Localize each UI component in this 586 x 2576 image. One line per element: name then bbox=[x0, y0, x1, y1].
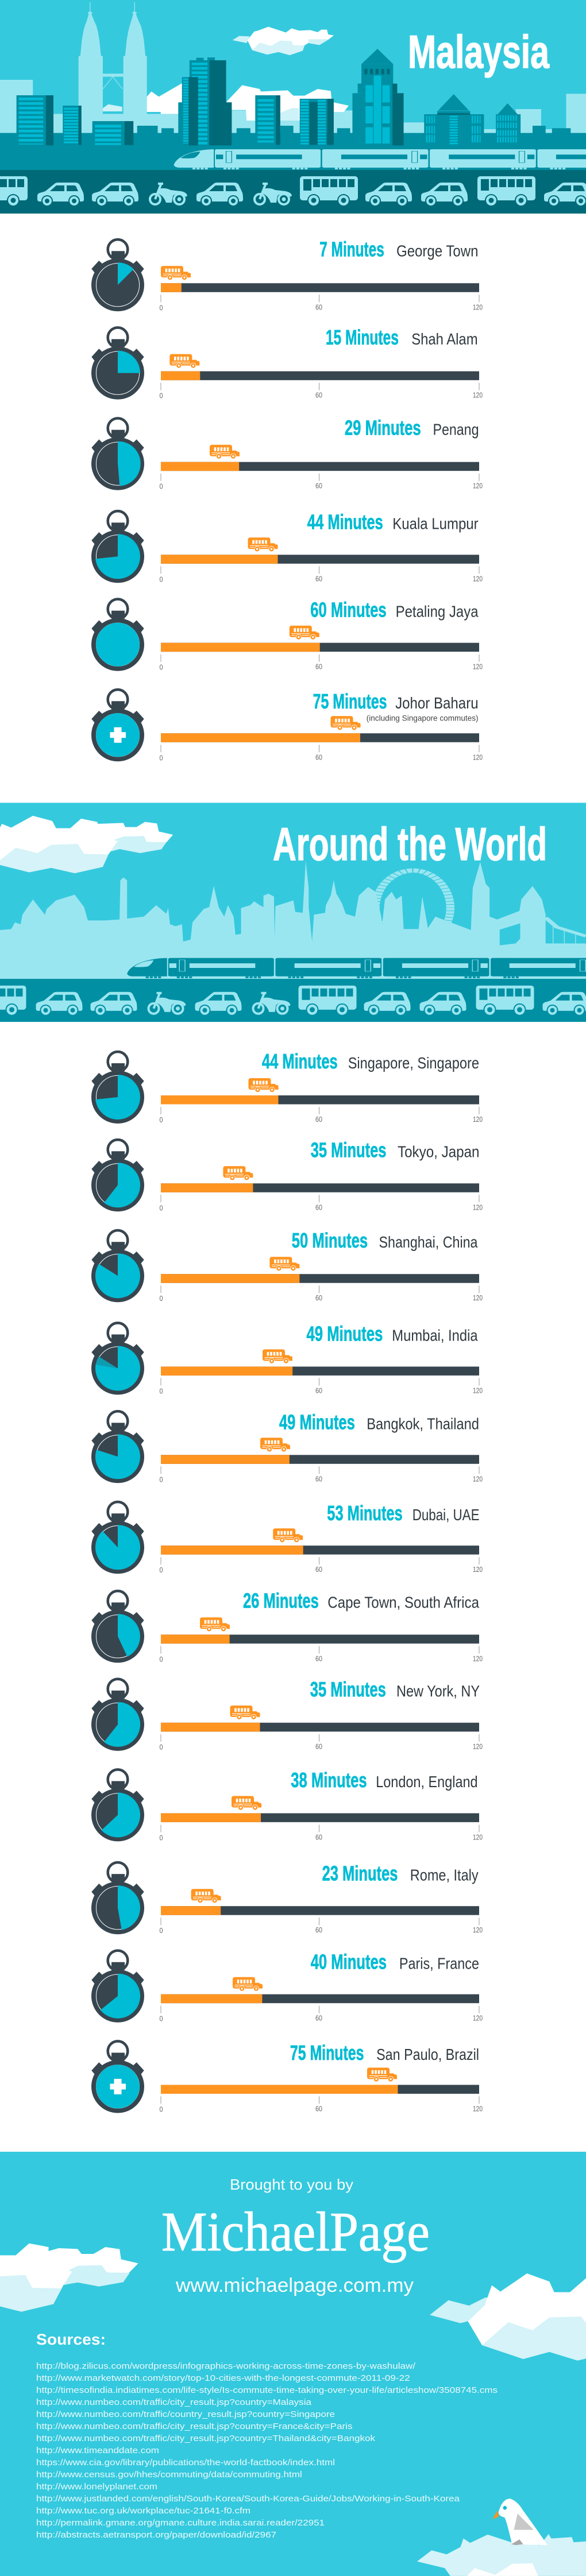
bus icon bbox=[223, 1166, 253, 1180]
bar bbox=[161, 1813, 479, 1822]
axis: 120 bbox=[473, 663, 483, 671]
city: Tokyo, Japan bbox=[398, 1143, 479, 1161]
minutes: 7 Minutes bbox=[319, 238, 384, 261]
bar bbox=[161, 1723, 479, 1731]
bus icon bbox=[210, 445, 240, 459]
row: Dubai bbox=[91, 1501, 483, 1574]
axis: 0 bbox=[160, 1566, 163, 1574]
axis bbox=[160, 1824, 483, 1842]
city: George Town bbox=[396, 242, 478, 260]
axis bbox=[160, 745, 483, 762]
axis: 120 bbox=[473, 1655, 483, 1663]
source list: http://permalink.gmane.org/gmane.culture.india.sarai.reader/22951 bbox=[36, 2518, 325, 2528]
section: world commute rows bbox=[91, 1049, 483, 2114]
axis: 60 bbox=[315, 303, 322, 311]
stopwatch bbox=[91, 1769, 144, 1841]
source list: https://www.cia.gov/library/publications/the-world-factbook/index.html bbox=[36, 2458, 335, 2467]
bus icon bbox=[290, 626, 319, 640]
row: Tokyo bbox=[91, 1138, 483, 1212]
panel: footer bbox=[0, 2152, 586, 2576]
bus icon bbox=[191, 1889, 221, 1903]
city: San Paulo, Brazil bbox=[376, 2046, 479, 2063]
axis bbox=[160, 474, 483, 491]
axis bbox=[160, 295, 483, 312]
bar bbox=[161, 283, 479, 292]
bar bbox=[161, 733, 479, 742]
source list: http://www.numbeo.com/traffic/city_result.jsp?country=Malaysia bbox=[36, 2397, 312, 2407]
axis: 120 bbox=[473, 1386, 483, 1394]
city: Shah Alam bbox=[411, 330, 478, 348]
bar bbox=[161, 1545, 479, 1555]
text: website: www.michaelpage.com.my bbox=[175, 2275, 414, 2296]
minutes: 35 Minutes bbox=[311, 1138, 386, 1162]
world cloud bbox=[110, 836, 166, 853]
axis: 0 bbox=[160, 2106, 163, 2114]
stopwatch bbox=[91, 1230, 144, 1302]
minutes: 50 Minutes bbox=[292, 1229, 368, 1252]
world skyline scene bbox=[0, 803, 586, 1022]
stopwatch bbox=[91, 1140, 144, 1211]
minutes: 49 Minutes bbox=[279, 1410, 355, 1434]
axis: 60 bbox=[315, 753, 322, 761]
minutes: 38 Minutes bbox=[291, 1768, 367, 1792]
bus icon bbox=[260, 1438, 290, 1452]
source list: http://www.marketwatch.com/story/top-10-cities-with-the-longest-commute-2011-09-22 bbox=[36, 2373, 410, 2383]
stopwatch bbox=[91, 1591, 144, 1663]
logo: MichaelPage: MichaelPage bbox=[161, 2201, 430, 2263]
minutes: 26 Minutes bbox=[243, 1589, 319, 1613]
axis: 0 bbox=[160, 1475, 163, 1483]
iceberg bbox=[417, 2534, 586, 2576]
stopwatch bbox=[91, 2041, 144, 2113]
axis: 0 bbox=[160, 483, 163, 491]
axis: 60 bbox=[315, 392, 322, 400]
axis: 0 bbox=[160, 1295, 163, 1303]
axis: 0 bbox=[160, 2015, 163, 2023]
row: Singapore bbox=[91, 1049, 483, 1124]
city: Mumbai, India bbox=[392, 1326, 478, 1344]
large white cloud bbox=[147, 83, 182, 114]
axis: 120 bbox=[473, 303, 483, 311]
source list: http://www.timeanddate.com bbox=[36, 2446, 159, 2455]
bar bbox=[161, 1183, 479, 1192]
bar bbox=[161, 371, 479, 380]
axis: 0 bbox=[160, 1744, 163, 1752]
heading: Sources: Sources: bbox=[36, 2331, 106, 2348]
footer background bbox=[0, 2152, 586, 2576]
icon: bird bbox=[492, 2498, 548, 2545]
city: Kuala Lumpur bbox=[392, 514, 479, 532]
minutes: 75 Minutes bbox=[313, 689, 387, 713]
row: George Town bbox=[91, 238, 483, 312]
traffic row bbox=[0, 176, 586, 207]
minutes: 15 Minutes bbox=[326, 326, 399, 349]
axis: 0 bbox=[160, 1834, 163, 1842]
bus icon bbox=[248, 537, 278, 552]
row: Cape Town bbox=[91, 1589, 483, 1663]
axis: 120 bbox=[473, 1833, 483, 1841]
axis: 120 bbox=[473, 575, 483, 583]
bus icon bbox=[200, 1617, 230, 1632]
axis: 120 bbox=[473, 2105, 483, 2113]
minutes: 49 Minutes bbox=[307, 1322, 383, 1345]
city: Paris, France bbox=[399, 1954, 479, 1972]
axis bbox=[160, 1107, 483, 1124]
source list: http://www.numbeo.com/traffic/city_result.jsp?country=France&city=Paris bbox=[36, 2422, 353, 2431]
axis bbox=[160, 1646, 483, 1663]
axis: 60 bbox=[315, 663, 322, 671]
train bbox=[174, 149, 586, 169]
stopwatch bbox=[91, 1323, 144, 1394]
minutes: 60 Minutes bbox=[310, 598, 387, 621]
stopwatch bbox=[91, 1862, 144, 1934]
bus icon bbox=[169, 354, 199, 368]
bus icon bbox=[331, 716, 361, 730]
city: Dubai, UAE bbox=[412, 1506, 479, 1524]
axis: 60 bbox=[315, 482, 322, 490]
bar bbox=[161, 1366, 479, 1376]
row: Penang bbox=[91, 416, 483, 491]
row: New York bbox=[91, 1678, 483, 1752]
bar bbox=[161, 1455, 479, 1464]
axis bbox=[160, 1195, 483, 1212]
minutes: 53 Minutes bbox=[327, 1501, 403, 1525]
axis: 120 bbox=[473, 1203, 483, 1211]
bar bbox=[161, 1634, 479, 1644]
axis bbox=[160, 1918, 483, 1935]
axis: 60 bbox=[315, 1203, 322, 1211]
axis: 0 bbox=[160, 392, 163, 400]
axis: 60 bbox=[315, 1294, 322, 1302]
skyline scene bbox=[0, 0, 586, 214]
bus icon bbox=[263, 1349, 292, 1363]
axis bbox=[160, 2097, 483, 2114]
source list: http://www.lonelyplanet.com bbox=[36, 2482, 157, 2492]
axis: 60 bbox=[315, 2105, 322, 2113]
stopwatch bbox=[91, 328, 144, 400]
axis bbox=[160, 1734, 483, 1752]
bar bbox=[161, 1994, 479, 2003]
axis: 0 bbox=[160, 1387, 163, 1395]
stopwatch bbox=[91, 1679, 144, 1751]
bar bbox=[161, 2085, 479, 2094]
source list: http://timesofindia.indiatimes.com/life-style/Is-commute-time-taking-over-your-life/articleshow/3508745.cms bbox=[36, 2385, 498, 2395]
axis: 60 bbox=[315, 575, 322, 583]
world train bbox=[127, 958, 586, 977]
bus icon bbox=[269, 1257, 299, 1271]
source list: http://www.justlanded.com/english/South-Korea/South-Korea-Guide/Jobs/Working-in-South-Korea bbox=[36, 2494, 460, 2504]
axis: 120 bbox=[473, 1926, 483, 1934]
row: Mumbai bbox=[91, 1322, 483, 1395]
minutes: 44 Minutes bbox=[262, 1049, 338, 1073]
row: Rome bbox=[91, 1861, 483, 1935]
row: London bbox=[91, 1768, 483, 1842]
small cloud bbox=[233, 36, 250, 43]
world traffic row bbox=[0, 986, 586, 1016]
source list bbox=[36, 2361, 498, 2540]
row: San Paulo bbox=[91, 2041, 483, 2114]
axis: 0 bbox=[160, 575, 163, 583]
axis: 60 bbox=[315, 1566, 322, 1574]
city: Singapore, Singapore bbox=[348, 1054, 479, 1072]
source list: http://www.numbeo.com/traffic/country_result.jsp?country=Singapore bbox=[36, 2410, 335, 2419]
axis: 60 bbox=[315, 1475, 322, 1483]
row: Kuala Lumpur bbox=[91, 510, 483, 583]
axis: 60 bbox=[315, 1386, 322, 1394]
axis: 60 bbox=[315, 1743, 322, 1751]
bar bbox=[161, 1095, 479, 1105]
footer clouds and bird bbox=[0, 2244, 586, 2576]
bar bbox=[161, 1906, 479, 1915]
axis: 0 bbox=[160, 304, 163, 312]
city: Cape Town, South Africa bbox=[327, 1594, 480, 1612]
axis bbox=[160, 2006, 483, 2023]
stopwatch bbox=[91, 1951, 144, 2023]
minutes: 75 Minutes bbox=[290, 2041, 364, 2064]
axis: 120 bbox=[473, 1115, 483, 1124]
bus icon bbox=[232, 1796, 261, 1810]
stopwatch bbox=[91, 1052, 144, 1124]
stopwatch bbox=[91, 1411, 144, 1483]
city: London, England bbox=[376, 1773, 478, 1791]
city: Petaling Jaya bbox=[396, 602, 479, 620]
minutes: 35 Minutes bbox=[310, 1678, 386, 1701]
axis bbox=[160, 1285, 483, 1303]
axis bbox=[160, 383, 483, 400]
bus icon bbox=[367, 2068, 397, 2082]
row: Shanghai bbox=[91, 1229, 483, 1303]
world road bbox=[0, 979, 586, 1022]
axis: 120 bbox=[473, 753, 483, 761]
axis: 0 bbox=[160, 754, 163, 762]
note: (including Singapore commutes) bbox=[367, 713, 479, 722]
bus icon bbox=[233, 1977, 263, 1991]
row: Bangkok bbox=[91, 1410, 483, 1483]
Petronas towers bbox=[0, 2, 586, 133]
city: New York, NY bbox=[396, 1682, 480, 1700]
axis: 120 bbox=[473, 1294, 483, 1302]
bus icon bbox=[248, 1078, 278, 1093]
minutes: 23 Minutes bbox=[322, 1861, 398, 1885]
axis: 60 bbox=[315, 2015, 322, 2023]
minutes: 29 Minutes bbox=[345, 416, 421, 439]
row: Johor Baharu bbox=[91, 689, 483, 762]
axis bbox=[160, 566, 483, 583]
bus icon bbox=[273, 1528, 303, 1543]
panel: Malaysia header bbox=[0, 0, 586, 214]
axis: 0 bbox=[160, 1116, 163, 1124]
axis: 0 bbox=[160, 664, 163, 672]
city: Bangkok, Thailand bbox=[367, 1415, 479, 1432]
stopwatch bbox=[91, 689, 144, 761]
axis bbox=[160, 1557, 483, 1574]
axis: 0 bbox=[160, 1655, 163, 1663]
landmark silhouettes bbox=[376, 870, 450, 945]
section: Malaysia commute rows bbox=[91, 238, 483, 762]
source list: http://www.census.gov/hhes/commuting/data/commuting.html bbox=[36, 2470, 302, 2480]
city: Johor Baharu bbox=[395, 694, 479, 712]
axis: 120 bbox=[473, 2015, 483, 2023]
row: Petaling Jaya bbox=[91, 598, 483, 672]
bar bbox=[161, 1274, 479, 1283]
axis: 60 bbox=[315, 1833, 322, 1841]
bar bbox=[161, 643, 479, 652]
stopwatch bbox=[91, 511, 144, 583]
axis: 120 bbox=[473, 1475, 483, 1483]
bus icon bbox=[161, 266, 191, 280]
axis: 120 bbox=[473, 392, 483, 400]
city: Rome, Italy bbox=[410, 1866, 479, 1884]
axis: 120 bbox=[473, 1566, 483, 1574]
axis: 0 bbox=[160, 1927, 163, 1935]
ground and road bbox=[0, 133, 586, 170]
text: Brought to you by: Brought to you by bbox=[230, 2176, 353, 2193]
axis bbox=[160, 654, 483, 672]
axis: 60 bbox=[315, 1115, 322, 1124]
axis: 60 bbox=[315, 1655, 322, 1663]
city buildings bbox=[17, 49, 570, 145]
source list: http://www.numbeo.com/traffic/city_result.jsp?country=Thailand&city=Bangkok bbox=[36, 2434, 376, 2443]
city: Shanghai, China bbox=[379, 1233, 478, 1251]
row: Shah Alam bbox=[91, 326, 483, 400]
bar bbox=[161, 462, 479, 471]
row: Paris bbox=[91, 1950, 483, 2023]
axis: 120 bbox=[473, 482, 483, 490]
axis: 60 bbox=[315, 1926, 322, 1934]
bus icon bbox=[230, 1706, 260, 1719]
axis bbox=[160, 1378, 483, 1395]
minutes: 44 Minutes bbox=[307, 510, 383, 533]
axis bbox=[160, 1466, 483, 1483]
source list: http://abstracts.aetransport.org/paper/download/id/2967 bbox=[36, 2530, 276, 2540]
source list: http://blog.zilicus.com/wordpress/infographics-working-across-time-zones-by-washulaw/ bbox=[36, 2361, 416, 2371]
panel: Around the World header bbox=[0, 803, 586, 1022]
bar bbox=[161, 555, 479, 564]
stopwatch bbox=[91, 599, 144, 671]
stopwatch bbox=[91, 239, 144, 311]
stopwatch bbox=[91, 1502, 144, 1574]
stopwatch bbox=[91, 419, 144, 490]
minutes: 40 Minutes bbox=[311, 1950, 387, 1973]
axis: 120 bbox=[473, 1743, 483, 1751]
axis: 0 bbox=[160, 1204, 163, 1212]
city: Penang bbox=[433, 420, 479, 438]
source list: http://www.tuc.org.uk/workplace/tuc-21641-f0.cfm bbox=[36, 2506, 250, 2516]
